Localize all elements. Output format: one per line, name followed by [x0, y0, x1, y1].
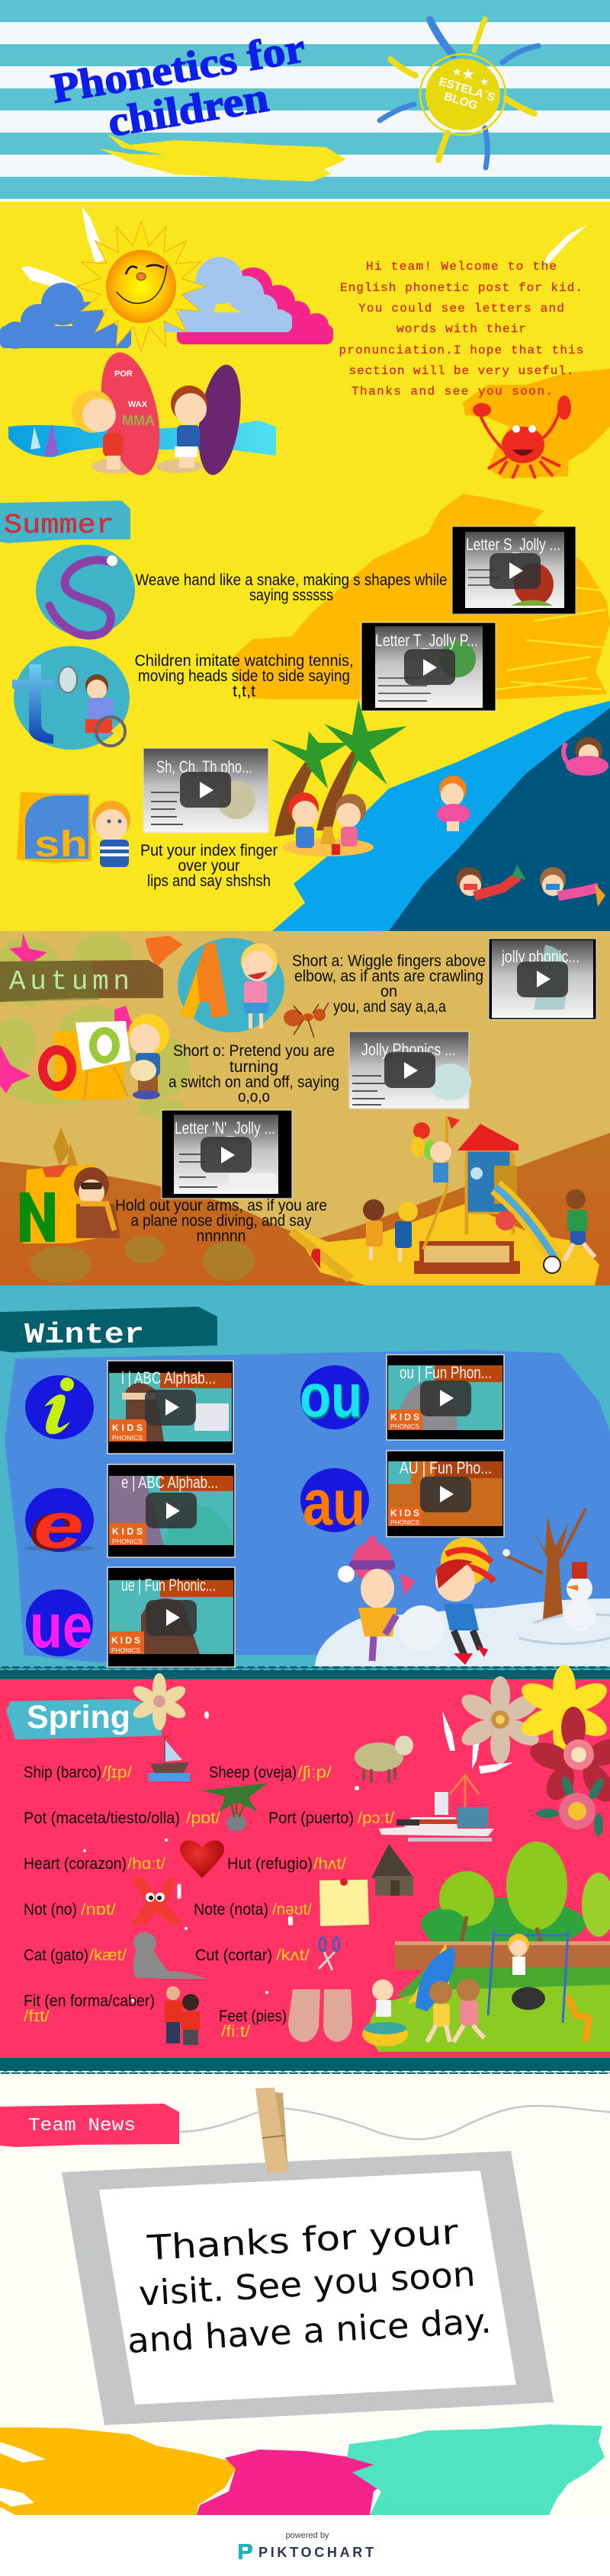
video: au sound: PHONICS: [390, 1519, 419, 1526]
panel: summer background: [0, 202, 610, 931]
icon: sheep: [355, 1736, 413, 1783]
heading: Spring: [6, 1699, 162, 1739]
video: ou sound: ou | Fun Phon...: [400, 1363, 492, 1382]
text block: t instruction: Children imitate watching tennis,: [134, 652, 354, 670]
video: ou sound: KIDS: [390, 1412, 419, 1422]
video: jolly phonics o: Jolly Phonics ...: [361, 1040, 456, 1059]
icon: ant: [284, 1003, 329, 1038]
text block: s instruction: Weave hand like a snake, making s shapes while: [136, 571, 447, 589]
word: sheep: Sheep (oveja): [209, 1764, 297, 1781]
text block: t instruction: moving heads side to side saying: [138, 667, 350, 685]
video: i sound: [108, 1361, 233, 1454]
text block: thanks note: [127, 2212, 493, 2361]
heading: Winter: [0, 1307, 217, 1352]
word: pot: Pot (maceta/tiesto/olla): [24, 1810, 180, 1827]
icon: surfing children: MMA: [122, 413, 155, 428]
icon: letter a with girl: [178, 938, 284, 1032]
video: sh: Sh, Ch, Th pho...: [156, 757, 252, 776]
icon: surfing children: WAX: [128, 400, 148, 409]
video: letter t: [361, 622, 496, 711]
icon: pink cloud: [177, 267, 333, 344]
word: feet: [219, 2008, 287, 2040]
text block: nose dive: Hold out your arms, as if you are: [115, 1197, 327, 1214]
word: not: [24, 1901, 116, 1918]
panel: spring background: [0, 1679, 610, 2071]
word: ship: /ʃɪp/: [102, 1764, 132, 1781]
word: port: Port (puerto): [268, 1810, 354, 1827]
video: letter s: [452, 526, 576, 614]
text block: nose dive: nnnnnn: [197, 1227, 246, 1245]
icon: wooden hut: [371, 1844, 414, 1896]
icon: swimmers: [437, 737, 608, 907]
heading: Summer: [0, 501, 130, 543]
word: ship: Ship (barco): [24, 1764, 101, 1781]
footer: powered by piktochart: PIKTOCHART: [258, 2545, 374, 2560]
video: i sound: KIDS: [112, 1422, 143, 1433]
word: cut: Cut (cortar): [195, 1947, 272, 1964]
word: fit: /fɪt/: [24, 2008, 50, 2025]
video: ou sound: PHONICS: [390, 1423, 419, 1430]
text block: sh instruction: over your: [178, 857, 239, 875]
icon: letter o with painter: [43, 1014, 169, 1101]
text block: welcome: Thanks and see you soon.: [352, 385, 553, 398]
video: letter n: [162, 1110, 292, 1198]
word: note: [194, 1901, 312, 1918]
word: sheep: /ʃiːp/: [297, 1764, 332, 1781]
footer: powered by piktochart: [0, 2515, 610, 2576]
word: feet: Feet (pies): [219, 2008, 287, 2025]
word: hut: Hut (refugio): [227, 1855, 313, 1873]
icon: letters ue: ue: [30, 1592, 92, 1661]
icon: letter sh with boy: [17, 792, 130, 867]
decorative white brush strokes: [21, 206, 587, 288]
title: Phonetics for: [48, 24, 308, 112]
word: cat: [24, 1947, 127, 1964]
text block: short o: a switch on and off, saying: [169, 1074, 339, 1091]
video: e sound: PHONICS: [112, 1538, 143, 1545]
video: i sound: i | ABC Alphab...: [121, 1368, 216, 1387]
icon: letter e: [23, 1488, 96, 1563]
heading: Team News: [0, 2104, 179, 2147]
icon: sticky note: [319, 1878, 369, 1926]
video: jolly phonics o: [349, 1032, 471, 1109]
text block: short a: on: [380, 983, 397, 1000]
panel: autumn background: [0, 931, 610, 1285]
icon: white brush marks: [442, 1710, 513, 1774]
video: au sound: KIDS: [390, 1508, 419, 1518]
text block: nose dive: [115, 1197, 327, 1245]
icon: letter e: e: [34, 1490, 84, 1561]
heading: Team News: Team News: [28, 2116, 136, 2136]
word: port: /pɔːt/: [358, 1810, 394, 1827]
icon: letters ou: ou: [300, 1363, 364, 1432]
icon: snake letter s: [36, 545, 135, 636]
video: au sound: [387, 1451, 504, 1537]
word: fit: [24, 1992, 155, 2025]
word: feet: /fiːt/: [221, 2023, 250, 2040]
icon: grey cat: [133, 1932, 206, 1979]
title: children: [104, 74, 271, 146]
text block: short o: [169, 1042, 339, 1106]
text block: s instruction: saying ssssss: [249, 587, 333, 604]
paint strokes: [0, 2424, 605, 2515]
blog badge sun: ★: [480, 76, 490, 88]
text block: short o: o,o,o: [238, 1088, 270, 1106]
icon: sailboat: [149, 1735, 190, 1781]
icon: beige flower: [130, 1673, 188, 1730]
heading: Spring: Spring: [27, 1699, 130, 1736]
text block: short a: Short a: Wiggle fingers above: [292, 952, 486, 970]
word: fit: Fit (en forma/caber): [24, 1992, 155, 2010]
panel: team news background: [0, 2071, 610, 2515]
text block: welcome: [339, 260, 584, 398]
icon: letter t with tennis boy: [12, 646, 130, 750]
clothes line: [179, 2106, 610, 2139]
word: heart: /hɑːt/: [127, 1855, 165, 1873]
video: ue sound: [108, 1567, 235, 1667]
text block: welcome: section will be very useful.: [349, 364, 573, 378]
text block: short o: turning: [230, 1058, 278, 1076]
video: i sound: PHONICS: [112, 1435, 143, 1442]
word: heart: Heart (corazon): [24, 1855, 127, 1873]
icon: palm trees with children: [271, 699, 407, 856]
text block: welcome: Hi team! Welcome to the: [366, 260, 557, 274]
icon: right flower cluster: [458, 1665, 610, 1836]
text block: welcome: words with their: [396, 322, 526, 336]
word: not: /nɒt/: [81, 1901, 116, 1918]
text block: sh instruction: lips and say shshsh: [147, 872, 271, 890]
word: note: Note (nota): [194, 1901, 268, 1918]
icon: letter e: e: [29, 1488, 79, 1563]
video: ue sound: KIDS: [111, 1635, 140, 1646]
icon: letter sh with boy: sh: [34, 824, 88, 865]
title: [48, 24, 308, 146]
vocabulary list: [24, 1764, 394, 2040]
text block: t instruction: [134, 652, 354, 700]
icon: letter n with aviator: [20, 1164, 120, 1243]
video: letter t: Letter T_Jolly P...: [375, 631, 478, 650]
text block: short a: [292, 952, 486, 1016]
video: ue sound: ue | Fun Phonic...: [121, 1576, 216, 1595]
video: jolly phonic a: jolly phonic...: [501, 947, 580, 966]
icon: couple in red: [165, 1986, 200, 2045]
text block: thanks note: Thanks for your: [146, 2212, 460, 2268]
heading: Winter: Winter: [24, 1319, 144, 1352]
icon: letters ou: ou: [300, 1362, 362, 1429]
icon: port with ships: [379, 1775, 494, 1842]
video: letter s: Letter S_Jolly ...: [466, 535, 560, 554]
text block: sh instruction: Put your index finger: [140, 842, 278, 859]
icon: bare feet: [288, 1989, 352, 2042]
blog badge sun: ★: [452, 66, 462, 78]
video: ou sound: [387, 1355, 504, 1440]
icon: park playground: [362, 1842, 610, 2052]
text block: nose dive: a plane nose diving, and say: [131, 1212, 312, 1230]
text block: t instruction: t,t,t: [233, 683, 255, 700]
icon: playground: [288, 1116, 599, 1285]
icon: blue cloud: [0, 283, 131, 349]
heading: Summer: Summer: [4, 510, 114, 541]
word: cat: /kæt/: [89, 1947, 127, 1964]
word: not: Not (no): [24, 1901, 77, 1918]
text block: s instruction: [136, 571, 447, 604]
video: jolly phonic a: [489, 939, 596, 1019]
word: note: /nəʊt/: [272, 1901, 312, 1918]
heading: Autumn: Autumn: [9, 966, 130, 997]
icon: smiling sun: [76, 222, 206, 351]
text block: short a: elbow, as if ants are crawling: [294, 968, 483, 985]
video: letter n: Letter 'N'_Jolly ...: [175, 1118, 275, 1138]
text block: short o: Short o: Pretend you are: [173, 1042, 335, 1060]
blog badge sun: [380, 19, 538, 168]
icon: letter i: [25, 1375, 94, 1439]
text block: welcome: You could see letters and: [358, 302, 564, 315]
panel: winter background: [0, 1285, 610, 1679]
header band: [0, 0, 610, 202]
icon: letters au: au: [303, 1467, 365, 1538]
video: sh: [143, 748, 268, 833]
blog badge sun: ★: [461, 65, 475, 83]
word: cat: Cat (gato): [24, 1947, 88, 1964]
blog badge sun: ESTELA´S: [437, 75, 496, 104]
icon: surfing children: POR: [114, 370, 133, 379]
heading: Autumn: [0, 960, 163, 1002]
video: ue sound: PHONICS: [111, 1647, 140, 1654]
icon: potted plant: [201, 1783, 268, 1832]
text block: sh instruction: [140, 842, 278, 890]
video: au sound: AU | Fun Pho...: [400, 1458, 492, 1477]
text block: short a: you, and say a,a,a: [333, 998, 446, 1016]
icon: surfing children: [8, 347, 276, 480]
icon: light blue cloud: [158, 257, 292, 332]
text block: welcome: English phonetic post for kid.: [340, 281, 583, 295]
icon: scissors: [319, 1938, 339, 1970]
icon: clothespin: [255, 2088, 288, 2173]
word: cut: /kʌt/: [276, 1947, 310, 1964]
word: hut: /hʌt/: [313, 1855, 346, 1873]
text block: thanks note: and have a nice day.: [127, 2300, 493, 2361]
icon: crab: [473, 395, 571, 478]
text block: thanks note: visit. See you soon: [138, 2254, 477, 2314]
video: e sound: e | ABC Alphab...: [121, 1473, 218, 1492]
blog badge sun: BLOG: [442, 90, 479, 112]
video: e sound: KIDS: [112, 1526, 143, 1537]
icon: red heart: [180, 1841, 224, 1878]
icon: children building a snowman: [315, 1509, 610, 1666]
icon: red x character: [131, 1878, 183, 1924]
text block: welcome: pronunciation.I hope that this: [339, 344, 584, 357]
note frame: [62, 2151, 554, 2425]
video: e sound: [108, 1464, 235, 1557]
word: pot: /pɒt/: [186, 1810, 220, 1827]
footer: powered by piktochart: powered by: [286, 2531, 329, 2540]
